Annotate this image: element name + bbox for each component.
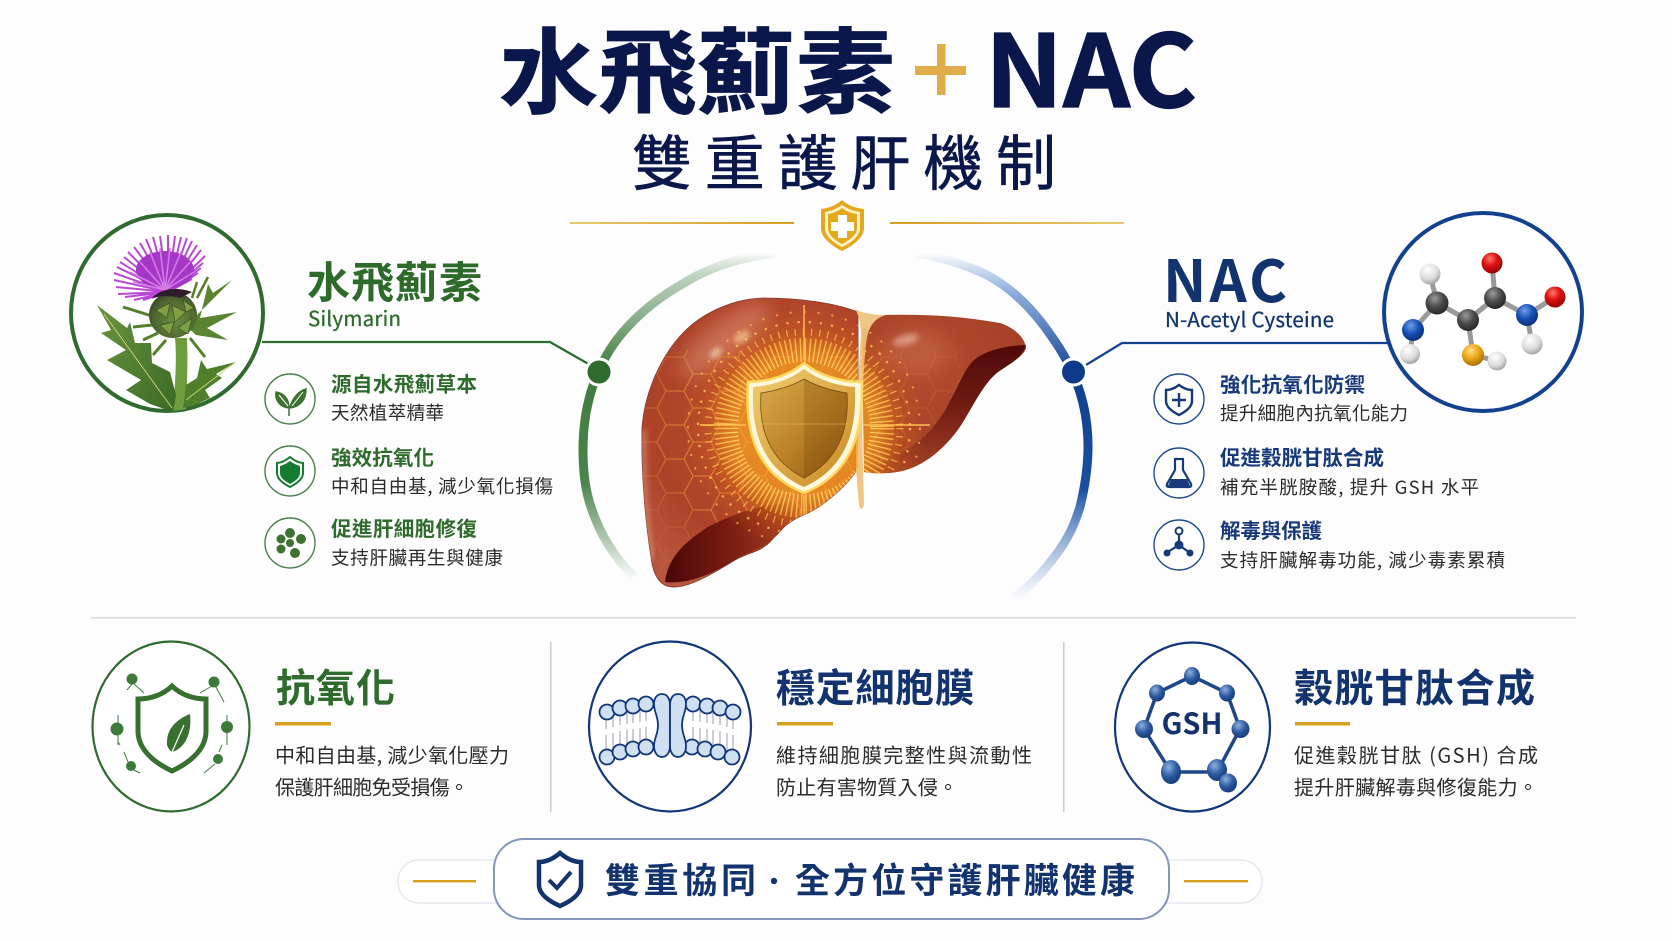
thistle leaves — [97, 305, 176, 412]
molecule illustration — [1384, 213, 1582, 411]
gold plus sign — [915, 44, 966, 95]
description: 促進穀胱甘肽 (GSH) 合成 — [1294, 740, 1538, 768]
bullet: 源自水飛薊草本: 天然植萃精華 — [331, 400, 444, 426]
card: 穩定細胞膜 — [589, 642, 1032, 812]
subtitle: 雙重護肝機制 — [632, 116, 1056, 203]
gold divider with shield — [570, 200, 1124, 251]
heading 抗氧化: 抗氧化 — [276, 658, 395, 714]
bullet: 強化抗氧化防禦: 提升細胞內抗氧化能力 — [1220, 400, 1408, 426]
title — [499, 0, 1197, 203]
label N-Acetyl Cysteine: N-Acetyl Cysteine — [1165, 303, 1334, 333]
ligament — [855, 309, 892, 509]
connector to liver — [1081, 343, 1390, 368]
bottom banner — [398, 839, 1262, 919]
bullet: 促進肝細胞修復: 支持肝臟再生與健康 — [331, 544, 503, 570]
bullet: 促進肝細胞修復: 促進肝細胞修復 — [331, 512, 477, 542]
main title: 水飛薊素: 水飛薊素 — [499, 0, 895, 133]
description: 維持細胞膜完整性與流動性 — [776, 740, 1032, 768]
heading 穀胱甘肽合成: 穀胱甘肽合成 — [1294, 658, 1535, 714]
right side pill — [1125, 860, 1262, 903]
label Silymarin: Silymarin — [308, 302, 401, 332]
card: 穀胱甘肽合成: 提升肝臟解毒與修復能力。 — [1294, 772, 1538, 800]
slogan: 雙重協同 — [605, 853, 756, 904]
thistle flower — [114, 235, 205, 300]
bullet: 解毒與保護: 解毒與保護 — [1220, 514, 1322, 544]
liver illustration — [640, 292, 1026, 590]
heading 水飛薊素: 水飛薊素 — [307, 249, 482, 311]
bullet: 解毒與保護 — [1154, 514, 1505, 573]
bullet: 強效抗氧化: 強效抗氧化 — [331, 441, 434, 471]
thistle illustration — [71, 215, 263, 412]
heading NAC: NAC — [1163, 235, 1287, 319]
bullet: 源自水飛薊草本: 源自水飛薊草本 — [331, 368, 477, 398]
bullet: 解毒與保護: 支持肝臟解毒功能, 減少毒素累積 — [1220, 547, 1505, 573]
panel: 水飛薊素 — [71, 215, 612, 570]
thistle stem — [173, 338, 187, 412]
icon: GSH ring — [1115, 642, 1270, 812]
left side pill — [398, 860, 538, 903]
bullet: 促進肝細胞修復 — [265, 512, 503, 570]
liver surface highlights — [644, 292, 951, 560]
gold shield — [748, 363, 862, 493]
panel: NAC — [1060, 213, 1582, 573]
hexagon pattern — [640, 350, 980, 590]
card: 抗氧化 — [92, 642, 509, 812]
slogan — [605, 853, 1135, 904]
shield glow and rays — [686, 305, 930, 546]
connector to liver — [262, 342, 592, 366]
icon: shield with check — [539, 853, 581, 906]
connector dot — [586, 359, 612, 385]
bullet: 促進穀胱甘肽合成: 補充半胱胺酸, 提升 GSH 水平 — [1220, 474, 1479, 500]
bullet: 強化抗氧化防禦 — [1154, 368, 1408, 426]
card: 抗氧化: 保護肝細胞免受損傷。 — [275, 772, 469, 800]
bullet: 強效抗氧化 — [265, 441, 553, 499]
arc: right blue — [918, 253, 1088, 598]
card: 穀胱甘肽合成 — [1115, 642, 1538, 812]
icon: cell membrane — [589, 642, 751, 812]
description: 中和自由基, 減少氧化壓力 — [275, 740, 509, 768]
liver undersides — [665, 504, 791, 582]
connector dot — [1060, 359, 1086, 385]
liver right lobe — [642, 298, 858, 587]
heading 穩定細胞膜: 穩定細胞膜 — [776, 658, 974, 714]
bullet: 促進穀胱甘肽合成: 促進穀胱甘肽合成 — [1220, 441, 1384, 471]
thistle bud — [149, 292, 197, 338]
bullet: 促進穀胱甘肽合成 — [1154, 441, 1479, 500]
icon: shield with leaf and particles — [92, 642, 250, 812]
bullet: 強化抗氧化防禦: 強化抗氧化防禦 — [1220, 368, 1365, 398]
card: 穩定細胞膜: 防止有害物質入侵。 — [776, 772, 958, 800]
arc: left green — [583, 253, 775, 577]
liver left lobe — [862, 315, 1026, 473]
main pill — [494, 839, 1169, 919]
bullet: 強效抗氧化: 中和自由基, 減少氧化損傷 — [331, 473, 553, 499]
bullet: 源自水飛薊草本 — [265, 368, 477, 426]
icon: GSH ring: GSH — [1162, 701, 1222, 743]
slogan: 全方位守護肝臟健康 — [795, 853, 1135, 904]
